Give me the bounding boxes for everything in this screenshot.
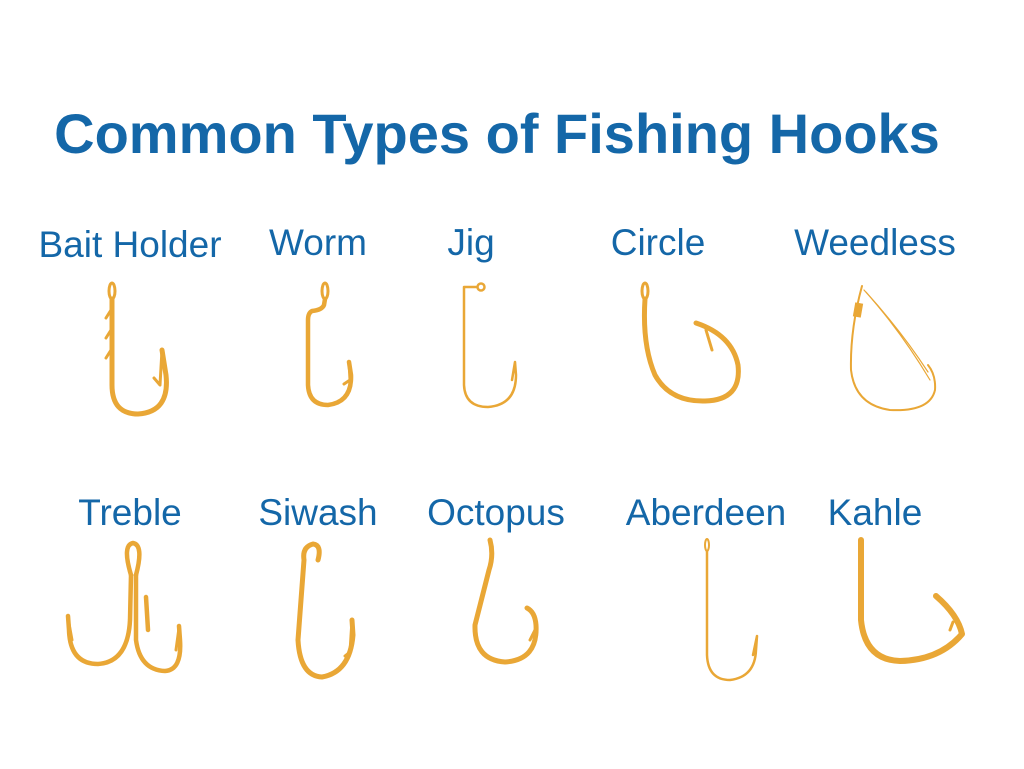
hook: bait holder [106, 283, 166, 414]
hook: siwash [298, 544, 353, 677]
labels: Treble [78, 492, 182, 533]
title: Common Types of Fishing Hooks [54, 102, 940, 165]
hook: jig [464, 284, 516, 407]
hook: worm [308, 283, 351, 405]
labels: Weedless [794, 222, 956, 263]
hook: weedless [851, 286, 935, 410]
hook: treble [68, 543, 180, 671]
labels: Jig [447, 222, 495, 263]
labels: Octopus [427, 492, 565, 533]
labels: Aberdeen [626, 492, 786, 533]
labels: Worm [269, 222, 367, 263]
hook: circle [642, 283, 738, 401]
hook: kahle [861, 540, 962, 661]
hooks [68, 283, 962, 680]
labels: Siwash [258, 492, 378, 533]
labels [38, 222, 956, 533]
hook: octopus [475, 540, 536, 662]
hook: aberdeen [705, 539, 757, 680]
labels: Kahle [828, 492, 922, 533]
labels: Circle [611, 222, 705, 263]
labels: Bait Holder [38, 224, 222, 265]
